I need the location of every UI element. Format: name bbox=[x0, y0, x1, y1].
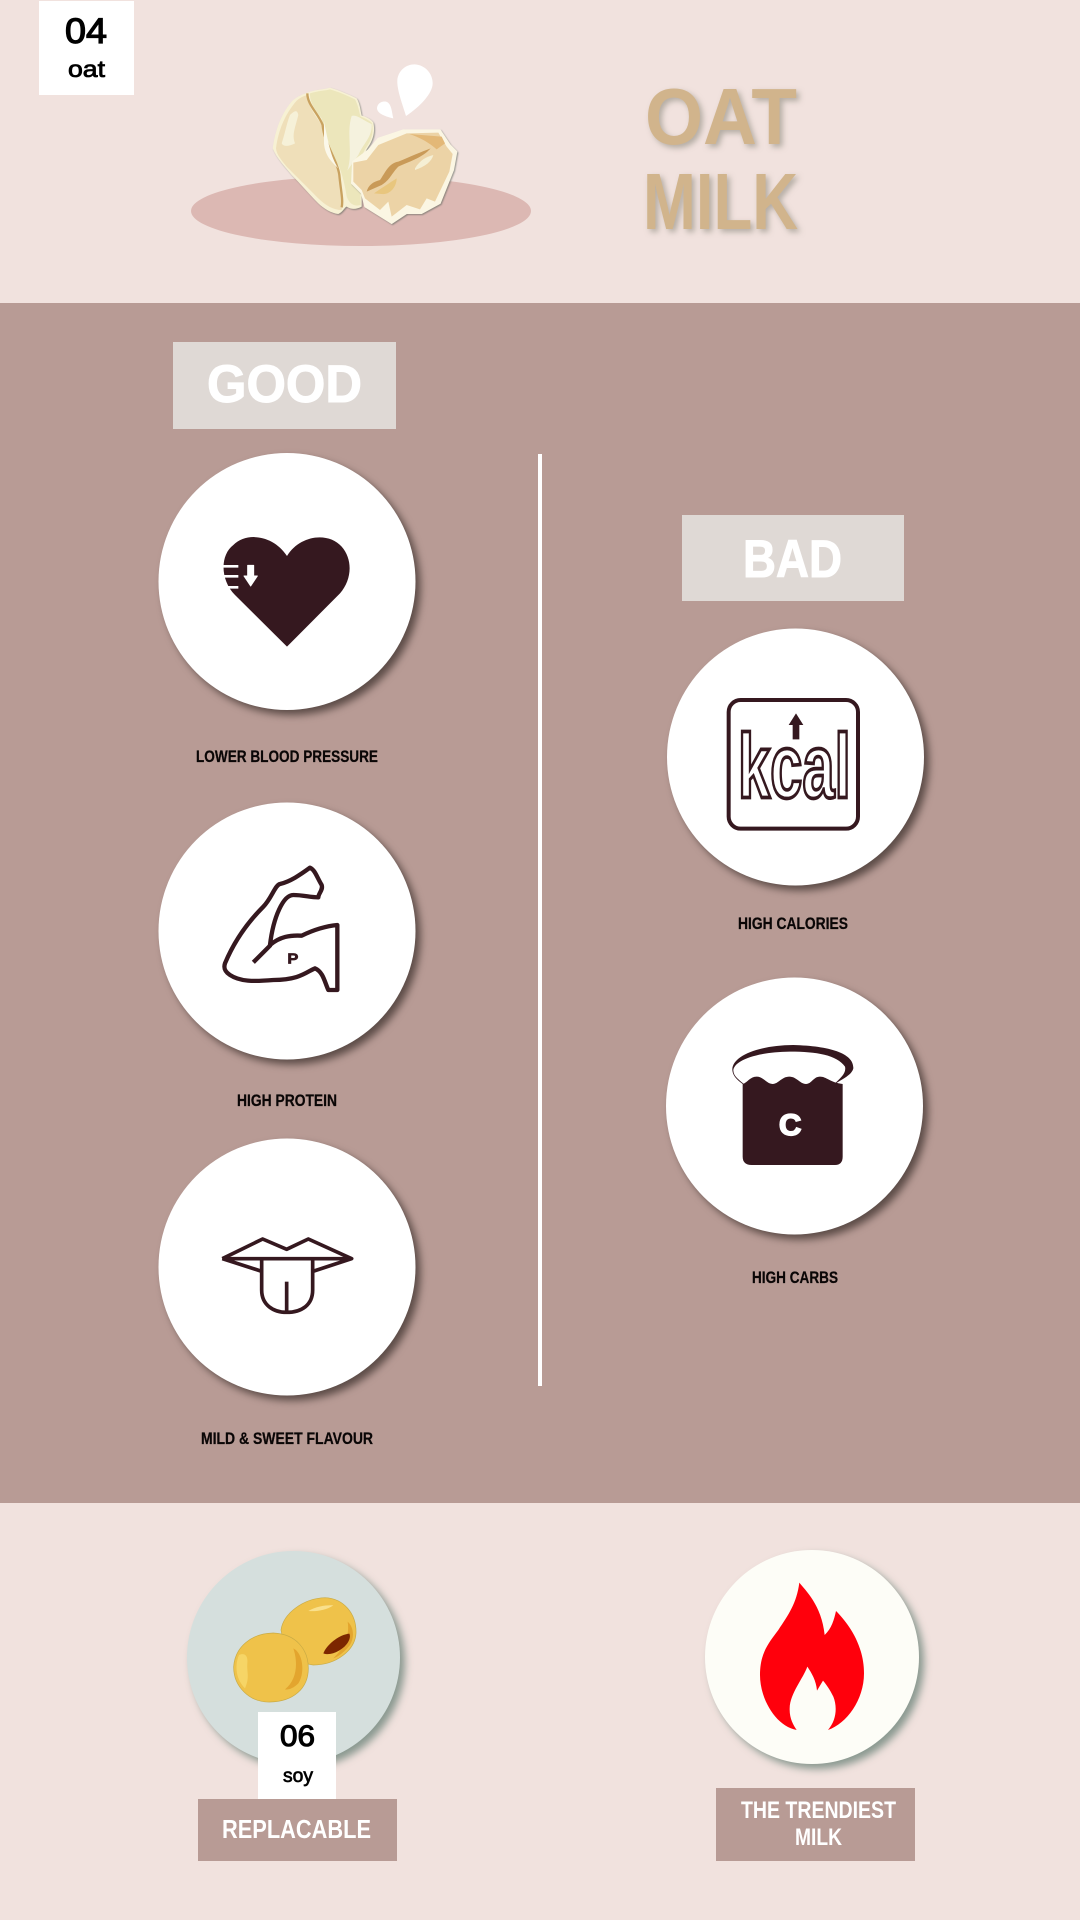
icon: right oat grain bbox=[352, 130, 457, 223]
icon: oat grains with milk drops bbox=[273, 64, 457, 223]
icon: flexed arm bbox=[224, 868, 337, 990]
label: high protein: HIGH PROTEIN bbox=[237, 1091, 337, 1110]
icon: soy beans bbox=[234, 1598, 356, 1702]
good item: mild and sweet flavour bbox=[158, 1138, 416, 1448]
good item: lower blood pressure bbox=[158, 453, 416, 766]
label: lower blood pressure: LOWER BLOOD PRESSURE bbox=[196, 747, 378, 766]
badge: 04 oat: oat bbox=[68, 56, 106, 82]
badge: 04 oat: 04 bbox=[65, 12, 107, 51]
icon: bread slice with C bbox=[732, 1045, 853, 1165]
panel: footer bbox=[0, 1503, 1080, 1920]
icon: flame bbox=[760, 1583, 864, 1730]
icon: bread slice with C: C bbox=[779, 1109, 801, 1142]
panel: header bbox=[0, 0, 1080, 303]
bad item: high carbs bbox=[666, 978, 923, 1287]
label: replacable bbox=[198, 1799, 397, 1861]
heading: good bbox=[173, 342, 396, 429]
icon: mouth with tongue bbox=[222, 1239, 352, 1312]
panel: good and bad bbox=[0, 303, 1080, 1503]
callout: the trendiest milk bbox=[705, 1550, 919, 1861]
icon: heart with down arrow bbox=[222, 537, 350, 647]
title: oat milk bbox=[643, 72, 798, 246]
icon: flexed arm: P bbox=[287, 952, 299, 968]
icon: kcal box with up arrow bbox=[729, 700, 858, 829]
label: the trendiest milk bbox=[716, 1788, 915, 1861]
heading: good: GOOD bbox=[207, 355, 362, 414]
callout: replacable by soy bbox=[187, 1551, 400, 1861]
badge: 06 soy: soy bbox=[283, 1766, 313, 1787]
ellipse: shadow under oats bbox=[191, 176, 531, 246]
title: oat milk: MILK bbox=[643, 157, 798, 246]
badge: 06 soy bbox=[258, 1712, 336, 1799]
icon: kcal box with up arrow: kcal bbox=[738, 717, 851, 818]
good item: high protein bbox=[158, 802, 416, 1110]
badge: 06 soy: 06 bbox=[280, 1720, 315, 1753]
bad item: high calories bbox=[667, 628, 924, 933]
label: high calories: HIGH CALORIES bbox=[738, 914, 848, 933]
heading: bad: BAD bbox=[743, 530, 842, 589]
heading: bad bbox=[682, 515, 904, 601]
icon: milk drops bbox=[377, 64, 433, 118]
icon: left oat grain bbox=[273, 88, 374, 214]
title: oat milk: OAT bbox=[645, 72, 797, 161]
label: replacable: REPLACABLE bbox=[222, 1814, 371, 1844]
label: mild and sweet flavour: MILD & SWEET FLAVOUR bbox=[201, 1429, 373, 1448]
label: the trendiest milk: THE TRENDIEST bbox=[741, 1797, 896, 1824]
badge: 04 oat bbox=[39, 1, 134, 95]
label: the trendiest milk: MILK bbox=[795, 1824, 843, 1851]
label: high carbs: HIGH CARBS bbox=[752, 1268, 838, 1287]
